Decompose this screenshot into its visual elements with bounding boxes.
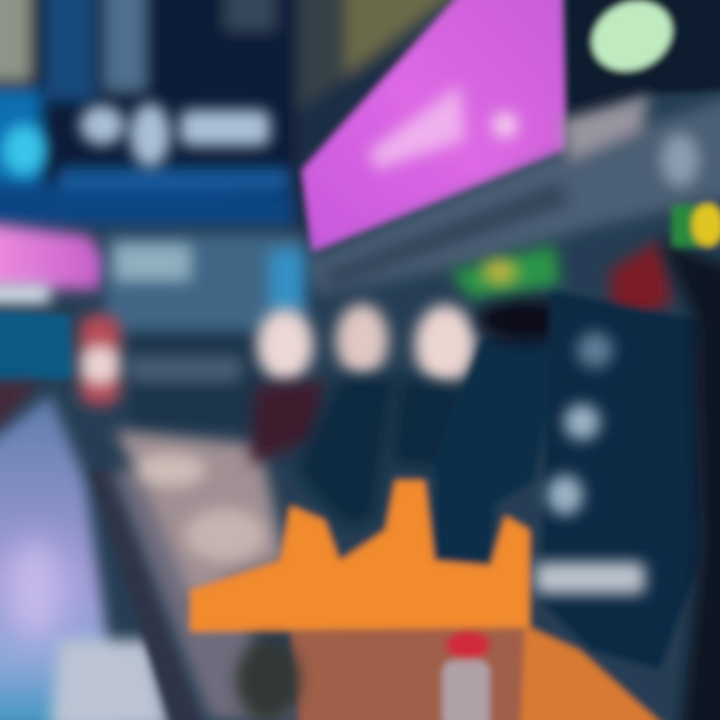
- panel: upper left ceiling: [0, 0, 310, 225]
- panel: pink sign: [0, 222, 106, 290]
- red garment: [610, 240, 672, 322]
- panel: top right dark corner: [565, 0, 720, 130]
- panel: middle left shelving: [0, 235, 305, 430]
- blurred floor highlight: [7, 540, 63, 640]
- panel: right hanging column: [540, 290, 700, 670]
- panel: orange block: [190, 480, 530, 632]
- panel: dark red left edge: [0, 382, 40, 450]
- panel: black cap: [477, 298, 573, 342]
- red and white bottle: [442, 631, 490, 720]
- panel: teal block: [0, 310, 72, 382]
- icon: pale green oval: [580, 0, 684, 85]
- panel: tall dark column: [435, 330, 560, 565]
- pale dots on column: [547, 332, 613, 515]
- pale label bar: [535, 562, 645, 594]
- panel: maroon garment: [250, 380, 325, 465]
- white and red figure: [80, 315, 120, 405]
- pale aisle bottom: [50, 640, 170, 720]
- grey aisle strip: [112, 470, 300, 720]
- icon: cyan glow: [2, 124, 46, 176]
- blurred sign lettering: [80, 103, 270, 167]
- dark round object: [236, 638, 300, 720]
- panel: dark blue trousers: [295, 375, 470, 528]
- accent: green and yellow tag: [672, 203, 720, 247]
- green strip: [450, 245, 560, 298]
- panel: top centre wall: [295, 0, 480, 240]
- panel: lower brown floor: [290, 625, 680, 720]
- panel: magenta billboard: [302, 0, 566, 252]
- yellow patch: [482, 259, 518, 285]
- dark floor stripe: [88, 470, 205, 720]
- panel: grey shelf band: [305, 95, 720, 295]
- blurred billboard lettering: [370, 85, 518, 170]
- panel: white shirts: [257, 304, 475, 385]
- panel: pale goods area: [115, 430, 285, 595]
- panel: far right dark edge: [660, 240, 720, 720]
- panel: lavender floor: [0, 395, 120, 720]
